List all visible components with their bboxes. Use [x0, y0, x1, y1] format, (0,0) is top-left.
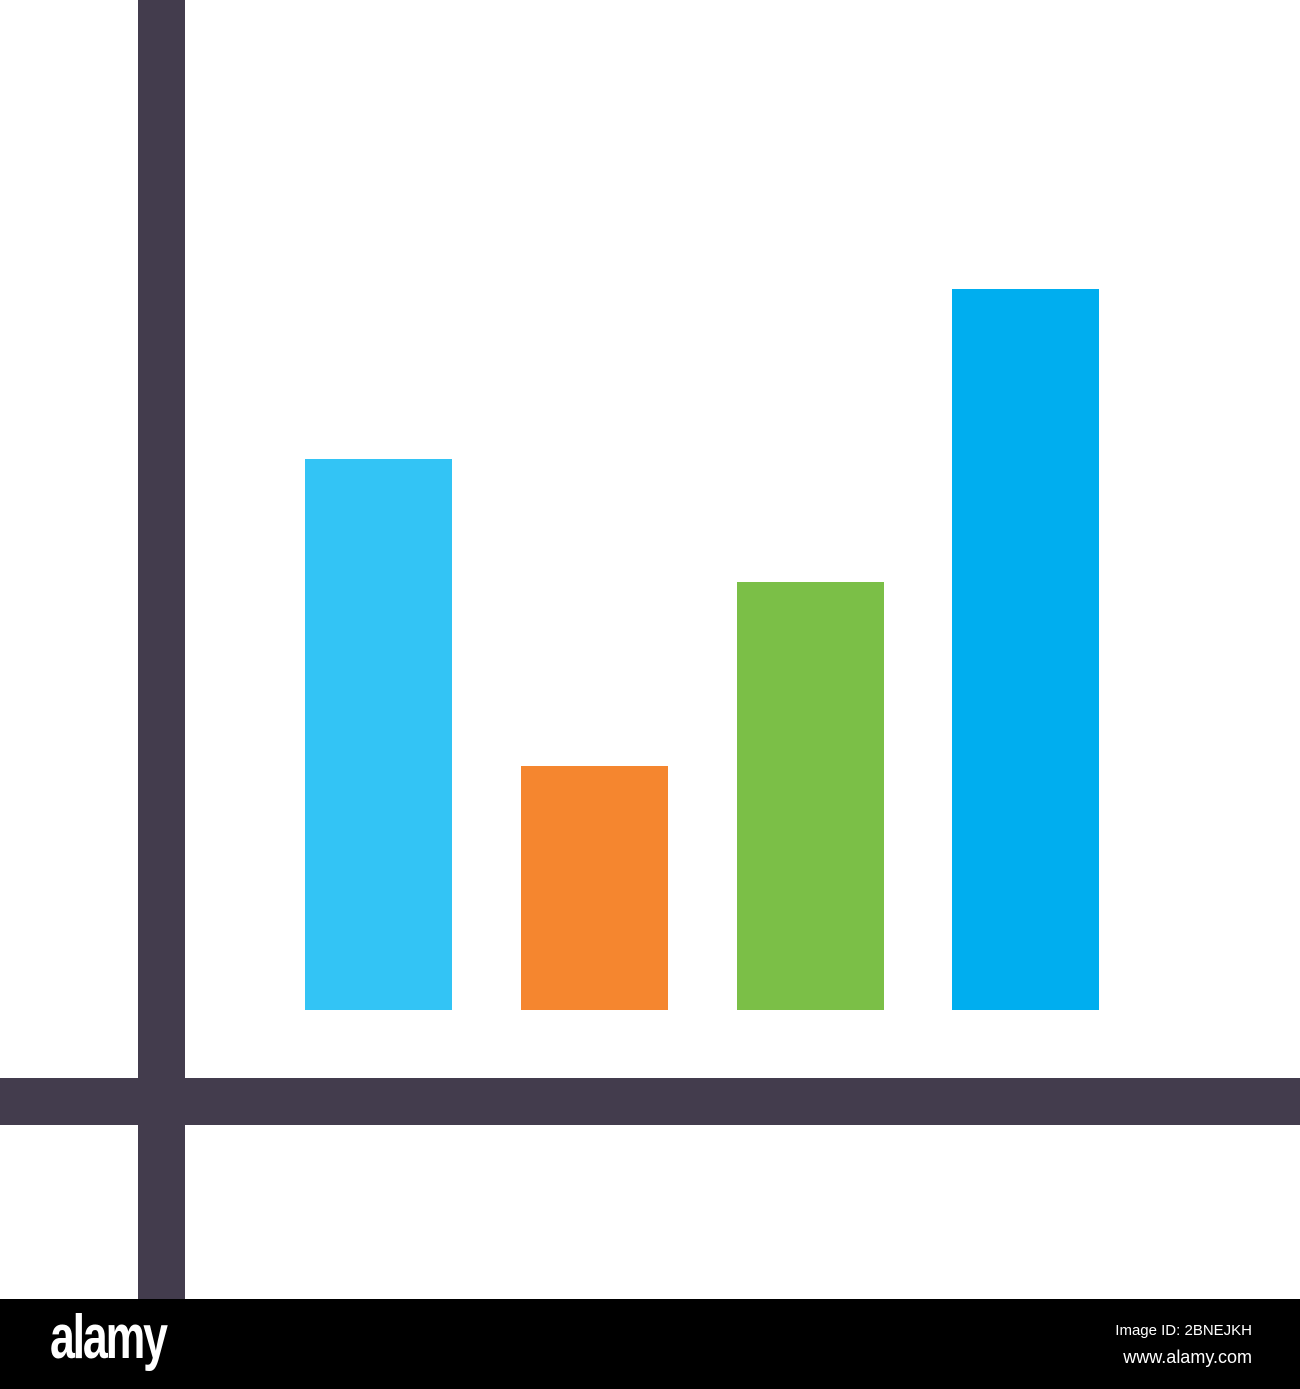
image id text	[1115, 1322, 1252, 1367]
image id text: Image ID: 2BNEJKH	[1115, 1322, 1252, 1339]
x axis	[0, 1078, 1300, 1125]
bar 1 light blue	[305, 459, 452, 1010]
bar 2 orange	[521, 766, 668, 1010]
bar 4 blue	[952, 289, 1099, 1010]
footer bar	[0, 1299, 1300, 1389]
image id text: www.alamy.com	[1123, 1347, 1252, 1367]
bar 3 green	[737, 582, 884, 1010]
logo: alamy: alamy	[50, 1303, 166, 1372]
y axis	[138, 0, 185, 1299]
